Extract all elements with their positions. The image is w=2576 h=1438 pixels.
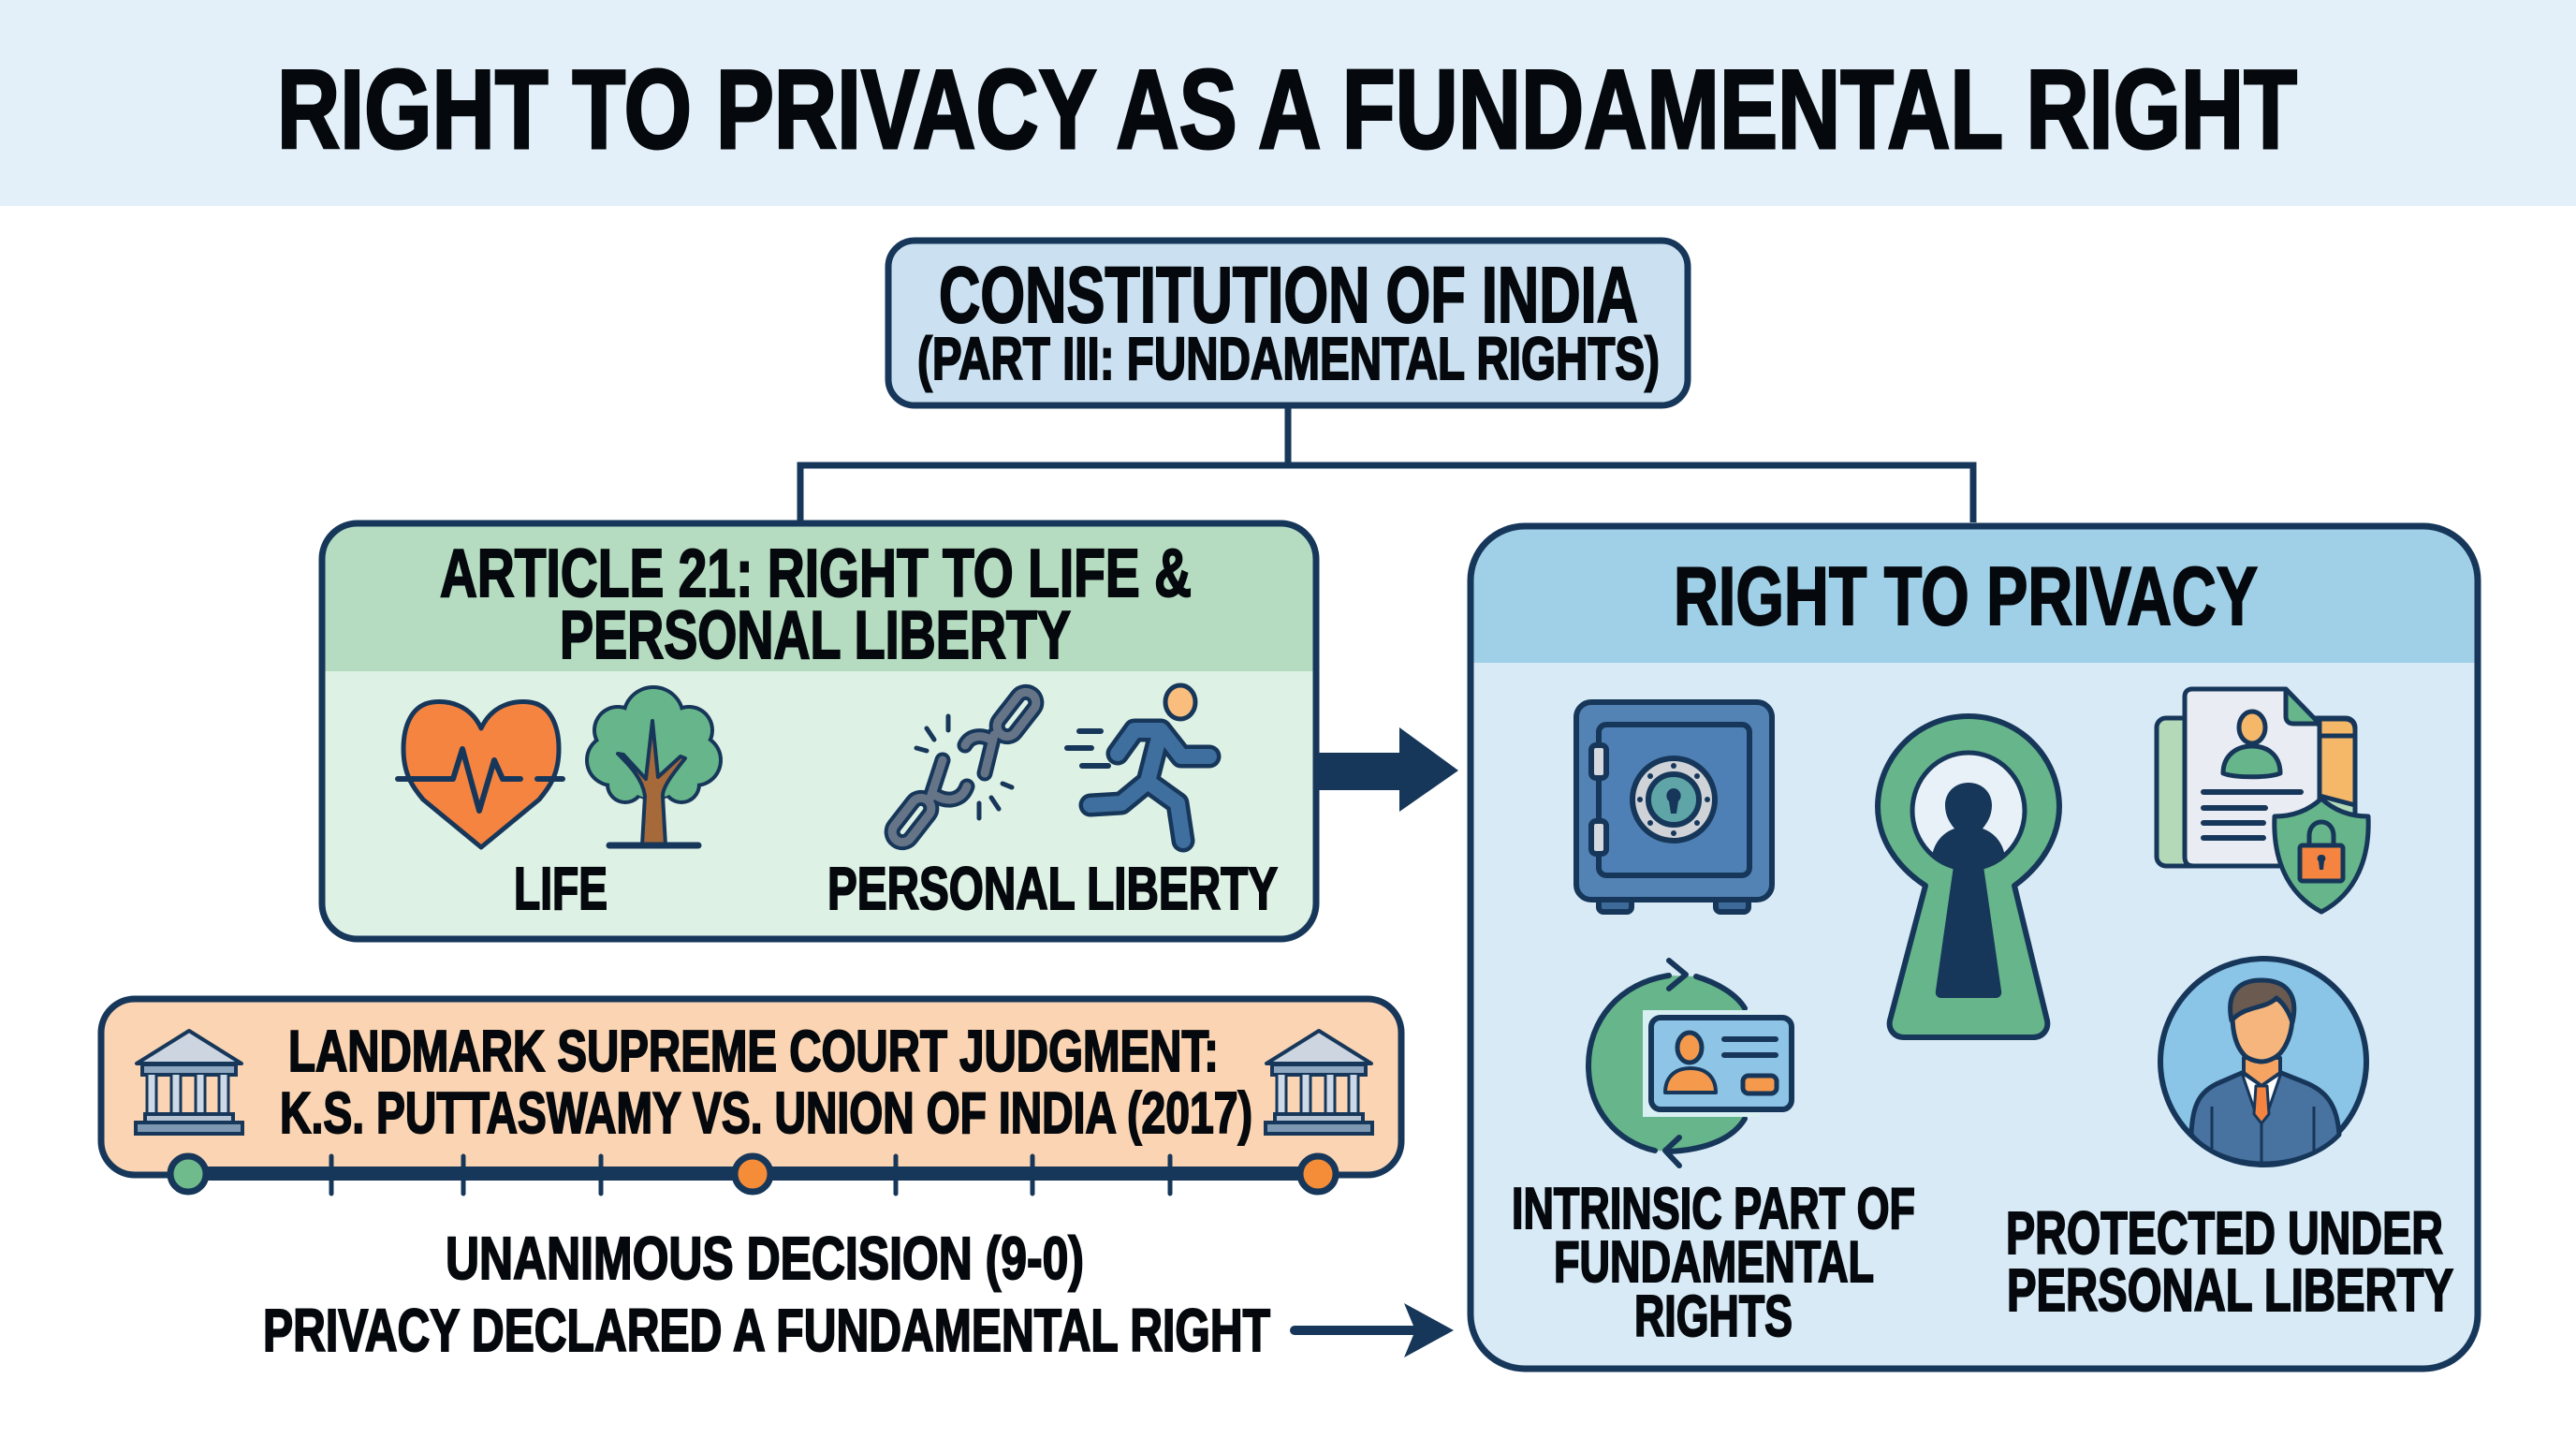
timeline	[170, 1156, 1336, 1194]
article 21 heading	[440, 536, 1192, 673]
label: intrinsic part of fundamental rights: FUNDAMENTAL	[1554, 1230, 1874, 1295]
panel: landmark judgment	[101, 999, 1401, 1194]
article 21 heading: PERSONAL LIBERTY	[560, 598, 1071, 673]
panel: right to privacy	[1471, 526, 2478, 1369]
panel: article 21	[322, 523, 1316, 939]
label: intrinsic part of fundamental rights: RIGHTS	[1634, 1284, 1793, 1349]
panel: constitution of india	[888, 241, 1688, 405]
constitution heading: CONSTITUTION OF INDIA	[939, 251, 1638, 339]
icon: id card with cycle arrows	[1588, 961, 1792, 1166]
icon: running person	[1067, 685, 1209, 841]
icon: court building left	[136, 1031, 242, 1134]
label: personal liberty: PERSONAL LIBERTY	[827, 855, 1278, 922]
judgment case name: K.S. PUTTASWAMY VS. UNION OF INDIA (2017)	[280, 1081, 1252, 1146]
label: intrinsic part of fundamental rights	[1512, 1177, 1915, 1349]
judgment heading: LANDMARK SUPREME COURT JUDGMENT:	[288, 1020, 1219, 1084]
icon: person in circle	[2160, 959, 2366, 1165]
label: protected under personal liberty	[2006, 1199, 2453, 1324]
constitution subheading: (PART III: FUNDAMENTAL RIGHTS)	[917, 325, 1660, 392]
icon: tree	[585, 685, 723, 845]
arrow: article 21 to right to privacy	[1316, 727, 1458, 812]
text: privacy declared fundamental right: PRIVACY DECLARED A FUNDAMENTAL RIGHT	[263, 1297, 1270, 1364]
icon: heart with pulse	[398, 702, 563, 847]
header band with title	[0, 0, 2576, 206]
text: unanimous decision: UNANIMOUS DECISION (9-0)	[446, 1225, 1084, 1292]
icon: keyhole with person	[1878, 716, 2059, 1037]
label: intrinsic part of fundamental rights: INTRINSIC PART OF	[1512, 1177, 1915, 1241]
article 21 heading: ARTICLE 21: RIGHT TO LIFE &	[440, 536, 1192, 611]
icon: court building right	[1266, 1031, 1372, 1134]
connector lines from constitution to panels	[800, 405, 1973, 522]
icon: safe	[1576, 702, 1772, 912]
icon: document with shield	[2157, 689, 2368, 912]
icon: broken chain	[888, 688, 1040, 846]
arrow: decision to right to privacy	[1290, 1303, 1454, 1357]
label: life: LIFE	[514, 855, 607, 922]
right to privacy heading: RIGHT TO PRIVACY	[1674, 550, 2258, 642]
